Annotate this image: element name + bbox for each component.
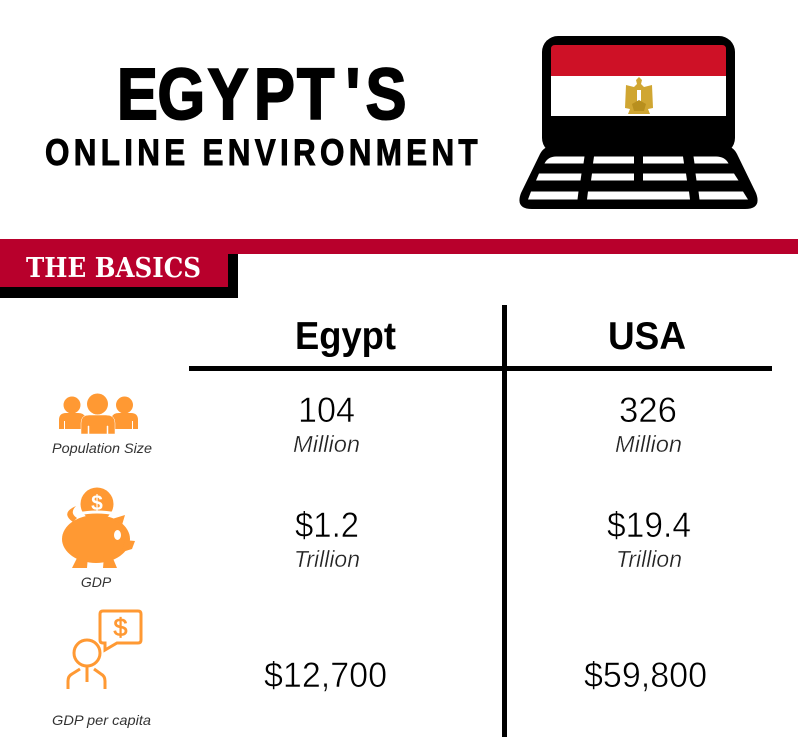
table grid lines: [189, 305, 772, 737]
USA GDP: $19.4: [607, 506, 691, 545]
USA GDP: [607, 506, 691, 572]
row: GDP per capita: [52, 611, 707, 728]
section banner: the basics: [0, 239, 798, 298]
USA population: [615, 391, 682, 457]
label: GDP per capita: GDP per capita: [52, 712, 151, 728]
USA population: 326: [619, 391, 677, 430]
Egypt GDP: Trillion: [294, 546, 360, 572]
USA population: Million: [615, 431, 682, 457]
Egypt population: Million: [293, 431, 360, 457]
Egypt population: 104: [298, 391, 355, 430]
icon: people: [59, 394, 138, 434]
icon: person with money speech bubble: [68, 611, 141, 689]
row: GDP: [62, 488, 691, 590]
icon: piggy bank: [62, 488, 135, 568]
title: [45, 55, 478, 174]
title: EGYPT'S: [117, 55, 406, 135]
label: GDP: GDP: [81, 574, 112, 590]
USA GDP per capita: $59,800: [584, 656, 707, 695]
Egypt GDP per capita: $12,700: [264, 656, 387, 695]
title: ONLINE ENVIRONMENT: [45, 133, 478, 174]
column heading: USA: USA: [608, 315, 686, 358]
column heading: Egypt: Egypt: [295, 315, 396, 358]
Egypt population: [293, 391, 360, 457]
section banner: the basics: THE BASICS: [26, 253, 201, 284]
icon: laptop with Egyptian flag: [519, 36, 758, 209]
Egypt GDP: [294, 506, 360, 572]
Egypt GDP: $1.2: [295, 506, 359, 545]
USA GDP: Trillion: [616, 546, 682, 572]
icon: piggy bank: $: [91, 492, 103, 515]
icon: person with money speech bubble: $: [114, 614, 128, 642]
label: population size: Population Size: [52, 440, 152, 456]
icon: flag eagle: [625, 77, 653, 114]
row: population size: [52, 391, 682, 457]
